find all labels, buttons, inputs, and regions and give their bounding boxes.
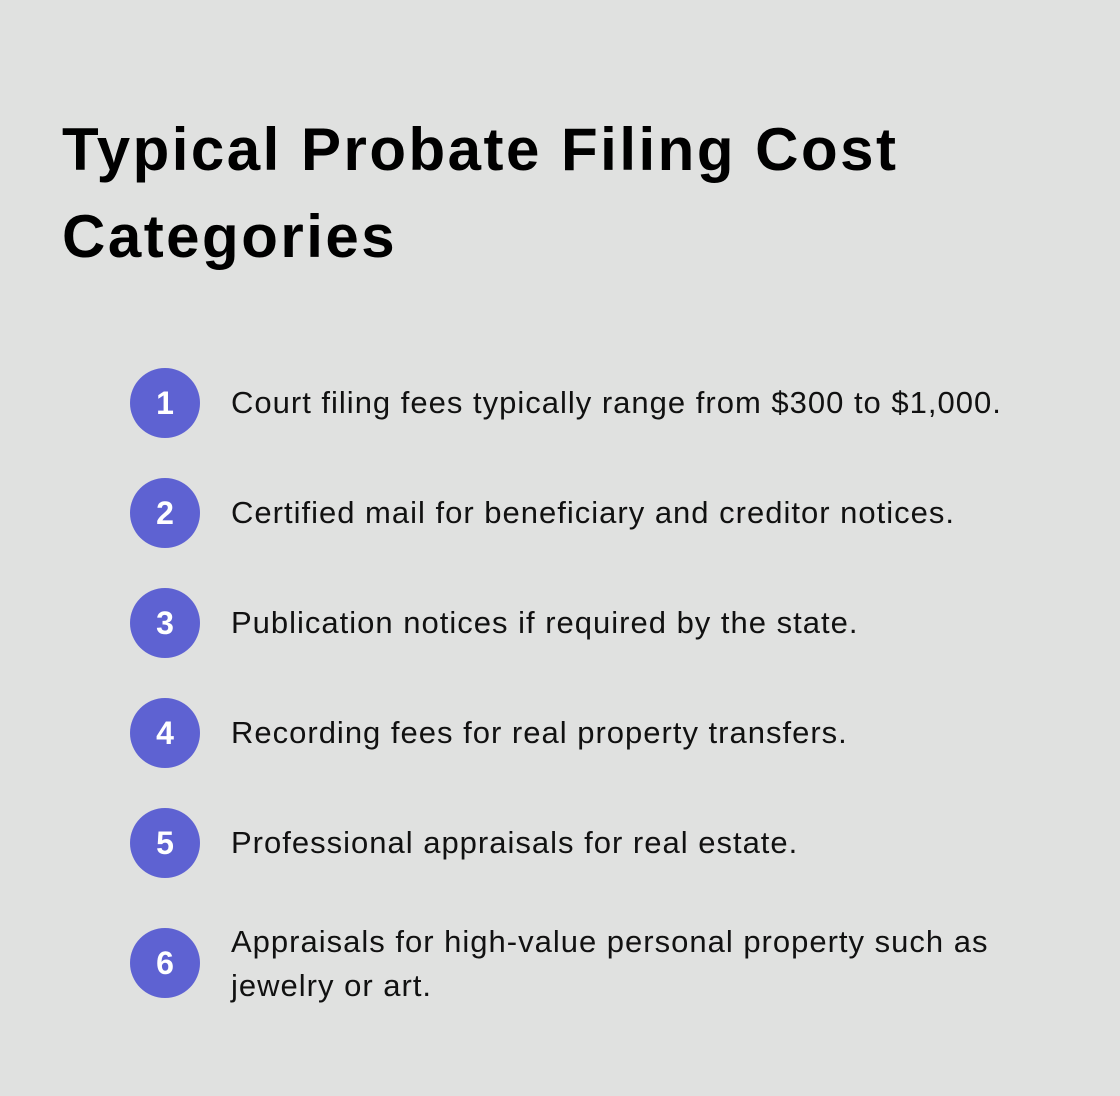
list item 1 [130,368,1002,438]
badge 4: 4 [156,715,174,751]
list item 6 [130,924,988,1003]
badge 5 [130,808,200,878]
list item 4 [130,698,848,768]
badge 2: 2 [156,495,174,531]
badge 1: 1 [156,385,174,421]
text 5: Professional appraisals for real estate. [231,825,798,860]
badge 1 [130,368,200,438]
badge 3 [130,588,200,658]
text 6 [230,924,988,1003]
list item 2 [130,478,955,548]
title [62,116,898,270]
text 4: Recording fees for real property transfers. [231,715,848,750]
text 1: Court filing fees typically range from $300 to $1,000. [231,385,1002,420]
badge 6 [130,928,200,998]
list item 3 [130,588,858,658]
text 3: Publication notices if required by the state. [231,605,858,640]
badge 4 [130,698,200,768]
badge 6: 6 [156,945,174,981]
text 2: Certified mail for beneficiary and creditor notices. [231,495,955,530]
list item 5 [130,808,798,878]
title: Categories [62,203,397,270]
badge 2 [130,478,200,548]
title: Typical Probate Filing Cost [62,116,898,183]
text 6: jewelry or art. [231,968,432,1003]
badge 5: 5 [156,825,174,861]
badge 3: 3 [156,605,174,641]
text 6: Appraisals for high-value personal property such as [231,924,988,959]
